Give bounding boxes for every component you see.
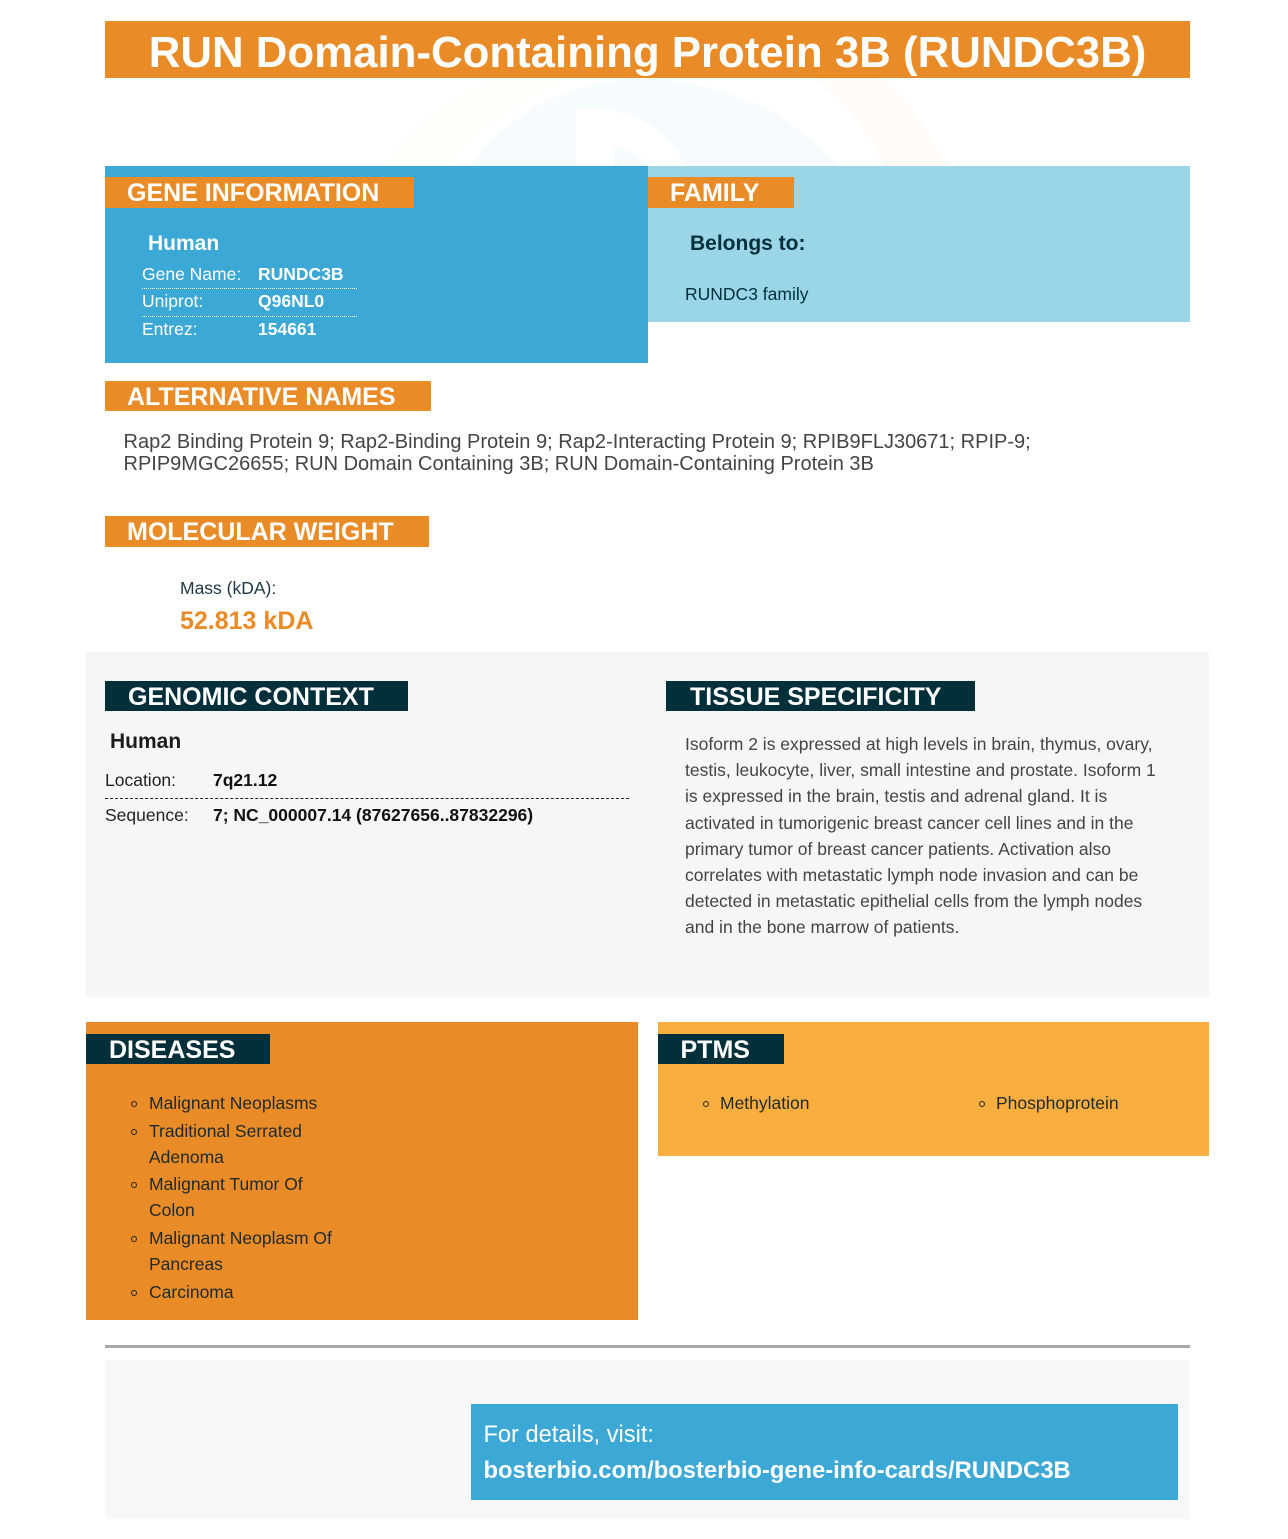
species label: Human	[110, 730, 181, 753]
gene details table: Entrez:	[142, 319, 197, 339]
callout: details link: bosterbio.com/bosterbio-gene-info-cards/RUNDC3B	[484, 1457, 1071, 1484]
gene details table	[142, 264, 357, 339]
PTM item: methylation: Methylation	[720, 1093, 810, 1113]
heading: alternative names: ALTERNATIVE NAMES	[127, 383, 396, 411]
tissue specificity text	[685, 734, 1156, 937]
panel: footer	[105, 1360, 1190, 1519]
location row: 7q21.12	[213, 770, 277, 790]
alternative names text: RPIP9MGC26655; RUN Domain Containing 3B; RUN Domain-Containing Protein 3B	[124, 453, 874, 475]
panel: diseases	[86, 1022, 638, 1320]
tissue specificity text: detected in metastatic epithelial cells from the lymph nodes	[685, 891, 1142, 911]
disease list: Pancreas	[149, 1254, 223, 1274]
species label: Human	[148, 232, 219, 255]
disease list: Colon	[149, 1200, 195, 1220]
alternative names text: Rap2 Binding Protein 9; Rap2-Binding Protein 9; Rap2-Interacting Protein 9; RPIB9FLJ30671; RPIP-9;	[124, 431, 1031, 453]
disease list: Malignant Tumor Of	[149, 1174, 303, 1194]
callout: details link	[471, 1404, 1178, 1500]
tissue specificity text: primary tumor of breast cancer patients. Activation also	[685, 839, 1111, 859]
sequence row	[105, 798, 629, 829]
gene details table: RUNDC3B	[258, 264, 344, 284]
gene details table: Q96NL0	[258, 291, 324, 311]
heading: diseases	[86, 1034, 270, 1064]
heading: family: FAMILY	[670, 179, 759, 207]
panel: genomic context and tissue specificity	[86, 652, 1209, 997]
disease list: Malignant Neoplasm Of	[149, 1228, 332, 1248]
panel: family	[648, 166, 1190, 322]
disease list: Adenoma	[149, 1147, 224, 1167]
callout: details link: For details, visit:	[484, 1422, 654, 1448]
gene details table: Uniprot:	[142, 291, 203, 311]
tissue specificity text: Isoform 2 is expressed at high levels in brain, thymus, ovary,	[685, 734, 1153, 754]
panel: gene information	[105, 166, 648, 363]
heading: gene information: GENE INFORMATION	[127, 179, 379, 207]
panel: PTMs	[658, 1022, 1209, 1156]
disease list: Carcinoma	[149, 1282, 234, 1302]
family value: RUNDC3 family	[685, 284, 808, 304]
tissue specificity text: and in the bone marrow of patients.	[685, 917, 959, 937]
heading: family	[648, 177, 794, 208]
location row: Location:	[105, 770, 176, 790]
sequence row: Sequence:	[105, 805, 189, 825]
location row	[105, 770, 277, 790]
title: RUN Domain-Containing Protein 3B (RUNDC3B)	[149, 28, 1146, 77]
heading: molecular weight: MOLECULAR WEIGHT	[127, 518, 394, 546]
PTM item: phosphoprotein: Phosphoprotein	[996, 1093, 1119, 1113]
mass label: Mass (kDA):	[180, 578, 276, 598]
alternative names text	[124, 431, 1031, 475]
heading: diseases: DISEASES	[109, 1036, 235, 1064]
belongs to label: Belongs to:	[690, 232, 806, 255]
gene details table: Gene Name:	[142, 264, 241, 284]
sequence row: 7; NC_000007.14 (87627656..87832296)	[213, 805, 533, 825]
gene details table: 154661	[258, 319, 316, 339]
disease list: Traditional Serrated	[149, 1121, 302, 1141]
disease list: Malignant Neoplasms	[149, 1093, 317, 1113]
heading: tissue specificity: TISSUE SPECIFICITY	[690, 683, 941, 711]
background watermark logo	[470, 78, 946, 166]
heading: PTMs	[658, 1034, 784, 1064]
disease list	[131, 1093, 332, 1302]
tissue specificity text: is expressed in the brain, testis and adrenal gland. It is	[685, 786, 1107, 806]
heading: genomic context: GENOMIC CONTEXT	[128, 683, 374, 711]
mass value: 52.813 kDA	[180, 607, 313, 635]
tissue specificity text: correlates with metastatic lymph node invasion and can be	[685, 865, 1138, 885]
tissue specificity text: activated in tumorigenic breast cancer cell lines and in the	[685, 813, 1133, 833]
tissue specificity text: testis, leukocyte, liver, small intestine and prostate. Isoform 1	[685, 760, 1156, 780]
heading: PTMs: PTMS	[680, 1036, 750, 1064]
